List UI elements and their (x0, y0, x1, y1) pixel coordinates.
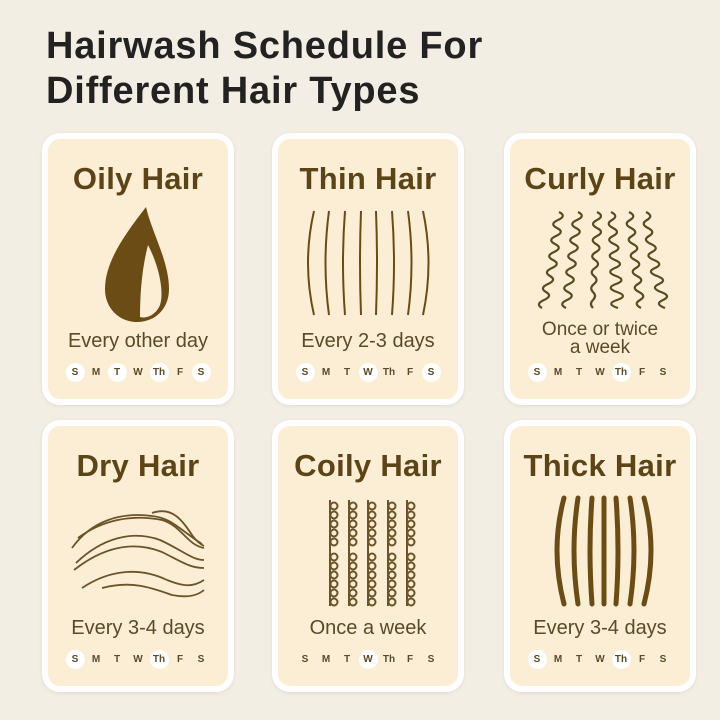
icon: drop (105, 207, 169, 322)
panel: dry hair (42, 420, 234, 692)
heading: thin: Thin Hair (299, 161, 437, 196)
day row: T (576, 654, 582, 665)
day row: W (595, 654, 605, 665)
day row: M (554, 654, 562, 665)
day row: S (72, 654, 78, 665)
icon: coily strands (329, 500, 416, 606)
panel: thin hair (272, 133, 464, 405)
day row: Th (153, 367, 165, 378)
day row: M (322, 654, 330, 665)
day row: M (92, 367, 100, 378)
day row: M (322, 367, 330, 378)
day row: F (407, 367, 413, 378)
icon: curly strands (538, 211, 668, 309)
day row: Th (383, 654, 395, 665)
day row: F (407, 654, 413, 665)
panel: oily hair (42, 133, 234, 405)
icon: wavy dry strands (71, 510, 204, 598)
day row: S (302, 367, 308, 378)
text: frequency: Every 3-4 days (71, 617, 205, 639)
day row: S (428, 654, 434, 665)
day row: S (198, 367, 204, 378)
text: frequency: Once or twice (542, 319, 658, 340)
day row: T (114, 654, 120, 665)
icon: thin strands (307, 210, 430, 316)
panel: coily hair (272, 420, 464, 692)
day row: W (595, 367, 605, 378)
day row: M (554, 367, 562, 378)
title (46, 25, 483, 112)
day row: S (72, 367, 78, 378)
day row (528, 650, 666, 669)
day row: F (639, 367, 645, 378)
day row: S (660, 367, 666, 378)
day row: W (133, 367, 143, 378)
heading: thick: Thick Hair (524, 448, 676, 483)
day row (296, 363, 441, 382)
day row: S (534, 654, 540, 665)
icon: thick strands (554, 496, 654, 606)
day row (66, 363, 211, 382)
text: frequency: Every 2-3 days (301, 330, 435, 352)
day row: F (177, 367, 183, 378)
day row: W (133, 654, 143, 665)
text: frequency: Every other day (68, 330, 208, 352)
day row: Th (383, 367, 395, 378)
day row: F (177, 654, 183, 665)
day row: Th (153, 654, 165, 665)
heading: curly: Curly Hair (524, 161, 676, 196)
title: Hairwash Schedule For (46, 25, 483, 67)
day row: F (639, 654, 645, 665)
heading: dry: Dry Hair (76, 448, 200, 483)
day row: W (363, 654, 373, 665)
text: frequency: Once a week (310, 617, 426, 639)
day row: S (302, 654, 308, 665)
heading: coily: Coily Hair (294, 448, 442, 483)
day row: S (660, 654, 666, 665)
day row: Th (615, 654, 627, 665)
day row: T (344, 654, 350, 665)
day row: S (534, 367, 540, 378)
text: frequency: a week (570, 337, 630, 358)
day row: Th (615, 367, 627, 378)
text: frequency: Every 3-4 days (533, 617, 667, 639)
title: Different Hair Types (46, 70, 420, 112)
day row: S (198, 654, 204, 665)
panel: thick hair (504, 420, 696, 692)
heading: oily: Oily Hair (73, 161, 203, 196)
day row (66, 650, 204, 669)
day row: T (344, 367, 350, 378)
day row (528, 363, 666, 382)
day row: T (114, 367, 120, 378)
panel: curly hair (504, 133, 696, 405)
day row: T (576, 367, 582, 378)
day row (302, 650, 434, 669)
day row: W (363, 367, 373, 378)
text: frequency (542, 319, 658, 358)
day row: S (428, 367, 434, 378)
day row: M (92, 654, 100, 665)
